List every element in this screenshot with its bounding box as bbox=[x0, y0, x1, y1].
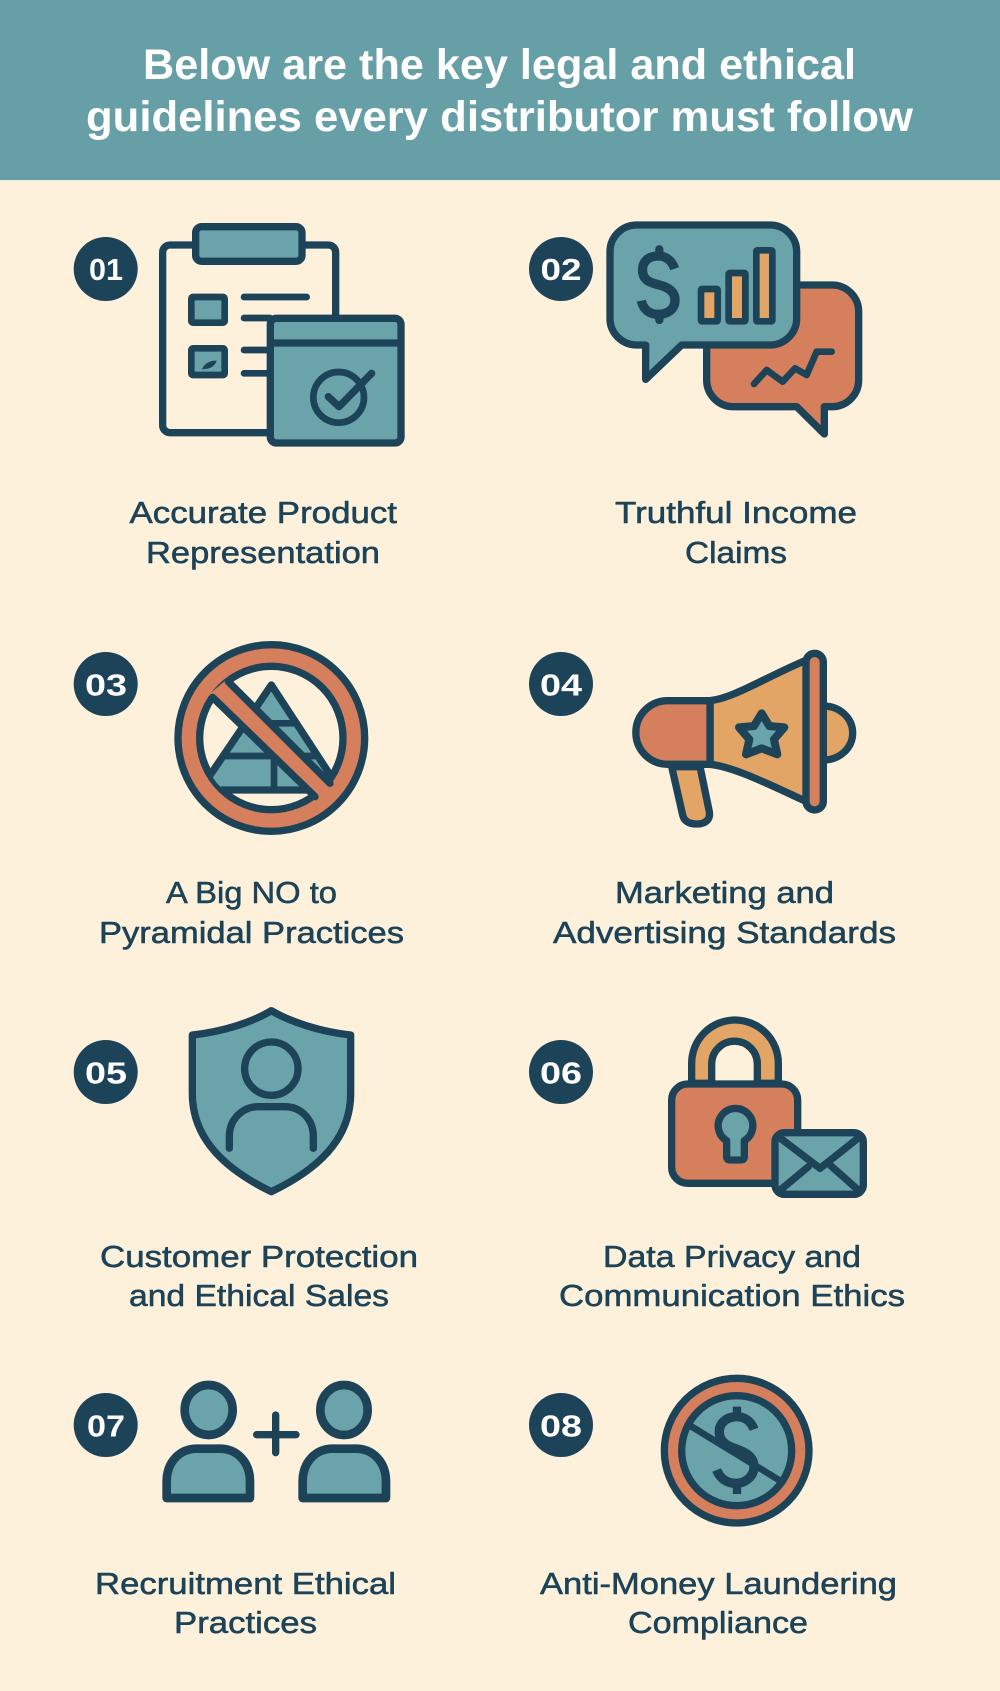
panel: 07 recruitment ethical practices bbox=[74, 1385, 396, 1640]
label: Recruitment Ethical bbox=[95, 1566, 396, 1601]
badge 07: 07 bbox=[87, 1408, 125, 1444]
label bbox=[615, 495, 857, 570]
label bbox=[100, 1239, 418, 1313]
title: Below are the key legal and ethical bbox=[143, 41, 856, 89]
label: A Big NO to bbox=[166, 875, 337, 910]
label: Data Privacy and bbox=[603, 1239, 861, 1274]
label: Representation bbox=[146, 535, 380, 570]
icon: padlock and envelope bbox=[672, 1020, 863, 1194]
label: Practices bbox=[174, 1605, 317, 1640]
badge 03 bbox=[74, 652, 138, 716]
badge 08 bbox=[529, 1393, 593, 1457]
icon: prohibited pyramid bbox=[178, 645, 365, 831]
badge 08: 08 bbox=[540, 1408, 582, 1444]
label bbox=[559, 1239, 905, 1313]
label bbox=[95, 1566, 396, 1640]
icon: two people with plus bbox=[167, 1385, 386, 1498]
label: Pyramidal Practices bbox=[99, 915, 404, 950]
header banner bbox=[0, 0, 1000, 182]
label: Customer Protection bbox=[100, 1239, 418, 1274]
label: and Ethical Sales bbox=[129, 1278, 389, 1313]
label bbox=[553, 875, 896, 950]
label: Communication Ethics bbox=[559, 1278, 905, 1313]
badge 02 bbox=[529, 237, 593, 301]
label: Marketing and bbox=[615, 875, 834, 910]
panel: 02 truthful income claims bbox=[529, 225, 859, 570]
panel: 04 marketing and advertising standards bbox=[529, 652, 896, 950]
label: Advertising Standards bbox=[553, 915, 896, 950]
panel: 06 data privacy and communication ethics bbox=[529, 1020, 905, 1313]
label bbox=[540, 1566, 897, 1640]
icon: speech bubbles with dollar and chart bbox=[610, 225, 859, 434]
badge 05 bbox=[74, 1040, 138, 1104]
label: Anti-Money Laundering bbox=[540, 1566, 897, 1601]
badge 07 bbox=[74, 1393, 138, 1457]
badge 01: 01 bbox=[89, 252, 123, 287]
label: Compliance bbox=[628, 1605, 808, 1640]
panel: 01 accurate product representation bbox=[74, 227, 401, 570]
badge 06: 06 bbox=[540, 1056, 582, 1090]
title bbox=[86, 41, 914, 141]
badge 06 bbox=[529, 1040, 593, 1104]
badge 03: 03 bbox=[85, 668, 127, 702]
label bbox=[99, 875, 404, 950]
label: Truthful Income bbox=[615, 495, 857, 530]
title: guidelines every distributor must follow bbox=[86, 93, 914, 141]
panel: 08 anti-money laundering compliance bbox=[529, 1378, 897, 1640]
badge 04: 04 bbox=[540, 668, 583, 702]
panel: 05 customer protection and ethical sales bbox=[74, 1011, 418, 1313]
badge 02: 02 bbox=[540, 252, 582, 287]
label: Accurate Product bbox=[130, 495, 397, 530]
label bbox=[130, 495, 397, 570]
badge 05: 05 bbox=[85, 1056, 127, 1090]
icon: clipboard and checked box bbox=[163, 227, 401, 443]
badge 01 bbox=[74, 237, 138, 301]
label: Claims bbox=[685, 535, 787, 570]
icon: shield with person bbox=[192, 1011, 351, 1192]
icon: megaphone with star bbox=[636, 653, 853, 824]
panel: 03 a big no to pyramidal practices bbox=[74, 645, 404, 950]
icon: prohibited dollar coin bbox=[664, 1378, 809, 1523]
badge 04 bbox=[529, 652, 593, 716]
